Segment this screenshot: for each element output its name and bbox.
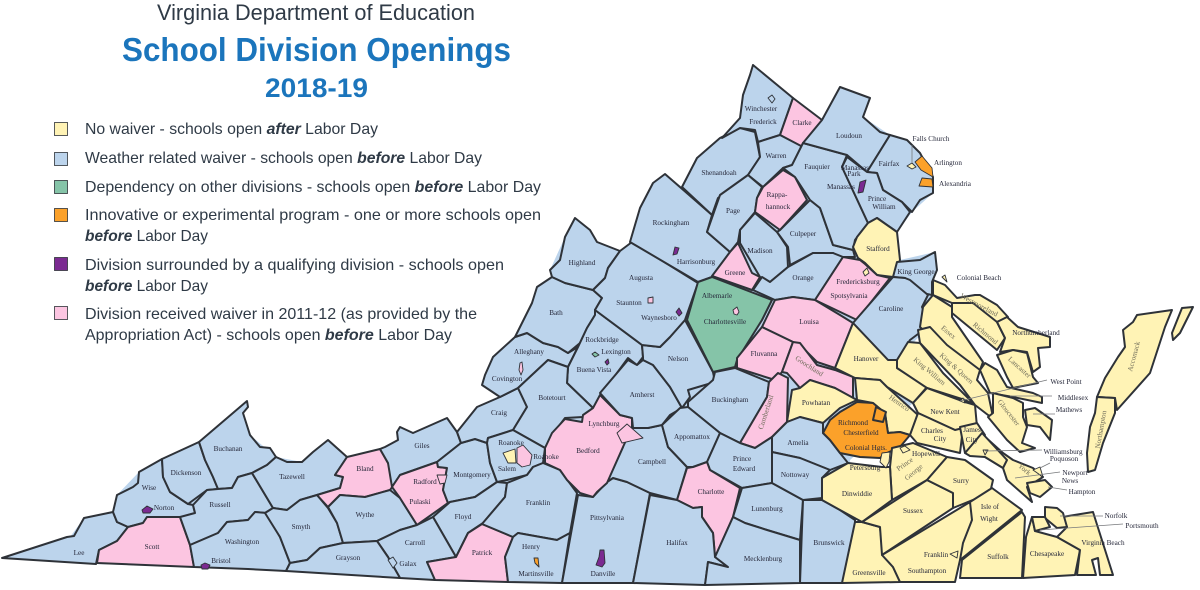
legend: innovative or experimental program: Innovative or experimental program - one or more schools open xyxy=(85,207,541,224)
map: division labels: Fredericksburg xyxy=(836,278,880,286)
map: division labels: Nottoway xyxy=(781,471,810,479)
map: division labels: Charles xyxy=(921,427,943,435)
map: division labels: Amelia xyxy=(787,439,809,447)
legend: surrounded division xyxy=(54,257,504,295)
map: division labels: Northumberland xyxy=(1012,329,1060,337)
map: division labels: Giles xyxy=(414,442,430,450)
map: division labels: Alexandria xyxy=(939,180,972,188)
map: division labels: Essex xyxy=(939,324,958,341)
map: division labels: Carroll xyxy=(405,539,425,547)
map: division labels: Lexington xyxy=(601,348,631,356)
map: division labels: Spotsylvania xyxy=(830,292,868,300)
map: division labels: Bland xyxy=(356,465,374,473)
map: division labels: King George xyxy=(897,268,935,276)
map: division labels: Williamsburg xyxy=(1043,448,1083,456)
map: division labels xyxy=(74,105,1159,578)
map: division labels: Martinsville xyxy=(518,570,554,578)
map: division labels: Colonial Hgts. xyxy=(845,444,887,452)
tidewater counties xyxy=(822,280,1193,583)
map: division labels: Patrick xyxy=(472,549,493,557)
map: division labels: Fauquier xyxy=(804,163,830,171)
map: division labels: hannock xyxy=(766,203,791,211)
southwest counties xyxy=(2,401,513,582)
map: division labels: King & Queen xyxy=(938,351,975,386)
map: division labels: Rappa- xyxy=(767,191,788,199)
map: division labels: Harrisonburg xyxy=(677,258,715,266)
map: division labels: Isle of xyxy=(981,503,1000,511)
map: division labels: Albemarle xyxy=(702,292,732,300)
map: division labels: Amherst xyxy=(630,391,654,399)
map: division labels: Westmoreland xyxy=(959,292,999,319)
map: division labels: Hanover xyxy=(854,355,879,363)
independent cities xyxy=(142,95,1043,569)
map: division labels: Bath xyxy=(549,309,563,317)
map: division labels: Sussex xyxy=(903,507,923,515)
map: division labels: Mecklenburg xyxy=(744,555,782,563)
map: division labels: Buchanan xyxy=(214,445,243,453)
map: division labels: Richmond xyxy=(838,419,868,427)
map: division labels: Waynesboro xyxy=(641,314,677,322)
map: division labels: Prince xyxy=(895,456,915,473)
map: division labels: Charlottesville xyxy=(704,318,746,326)
map: division labels: Middlesex xyxy=(1058,394,1089,402)
title xyxy=(122,0,511,103)
legend: 2011-12 waiver: Appropriation Act) - schools open before Labor Day xyxy=(85,327,452,344)
map: division labels: Campbell xyxy=(638,458,666,466)
map: division labels: Prince xyxy=(733,455,751,463)
map: division labels: Augusta xyxy=(629,274,654,282)
map: division labels: Hampton xyxy=(1069,488,1096,496)
map: division labels: Rockingham xyxy=(653,219,690,227)
map: division labels: Highland xyxy=(569,259,596,267)
map: division labels: Grayson xyxy=(336,554,361,562)
map: division labels: Madison xyxy=(747,247,773,255)
legend: 2011-12 waiver: Division received waiver in 2011-12 (as provided by the xyxy=(85,306,477,323)
map: division labels: Greensville xyxy=(852,569,886,577)
map: division labels: Fluvanna xyxy=(751,350,778,358)
map: division labels: Mathews xyxy=(1056,406,1082,414)
map: division labels: Orange xyxy=(792,274,814,282)
map: division labels: Russell xyxy=(209,501,231,509)
map: division labels: Covington xyxy=(492,375,523,383)
map: division labels: Roanoke xyxy=(498,439,524,447)
map: division labels: Salem xyxy=(498,465,516,473)
map: division labels: Nelson xyxy=(668,355,689,363)
map: division labels: Henry xyxy=(522,543,540,551)
legend: innovative or experimental program: before Labor Day xyxy=(85,228,208,245)
legend: surrounded division: before Labor Day xyxy=(85,278,208,295)
map: division labels: Montgomery xyxy=(453,471,491,479)
map: division labels: James xyxy=(963,426,981,434)
map: division labels: King William xyxy=(912,356,947,387)
map: division labels: Washington xyxy=(225,538,259,546)
map: division labels: Norfolk xyxy=(1105,512,1128,520)
map: division labels: Portsmouth xyxy=(1125,522,1159,530)
map: division labels: Wythe xyxy=(356,511,374,519)
map: division labels: Dickenson xyxy=(171,469,202,477)
map: division labels: Bristol xyxy=(211,557,231,565)
map: division labels: George xyxy=(903,463,924,482)
map: division labels: Lynchburg xyxy=(588,420,620,428)
map: division labels: Pittsylvania xyxy=(590,514,625,522)
map: division labels: Southampton xyxy=(908,567,947,575)
map: division labels: Winchester xyxy=(745,105,778,113)
map: division labels: Craig xyxy=(491,409,507,417)
map: division labels: Colonial Beach xyxy=(957,274,1002,282)
title: School Division Openings xyxy=(122,31,511,68)
map: division labels: Greene xyxy=(725,269,745,277)
map: division labels: Wise xyxy=(142,484,156,492)
map: division labels: Floyd xyxy=(455,513,472,521)
map: division labels: Lunenburg xyxy=(751,505,783,513)
map: division labels: Henrico xyxy=(887,393,911,414)
map: division labels: Staunton xyxy=(616,299,642,307)
map: division labels: Prince xyxy=(868,195,886,203)
map: division labels: Powhatan xyxy=(802,399,831,407)
central-west counties xyxy=(457,174,730,583)
map: division labels: Rockbridge xyxy=(585,336,619,344)
map: division labels: Appomattox xyxy=(674,433,710,441)
map: division labels: Buckingham xyxy=(712,396,749,404)
legend: no waiver: No waiver - schools open after Labor Day xyxy=(85,121,378,138)
legend: dependency on other divisions: Dependency on other divisions - schools open before Labor Day xyxy=(85,179,541,196)
map: division labels: Northampton xyxy=(1094,410,1108,449)
map: division labels: Arlington xyxy=(934,159,962,167)
map: division labels: Brunswick xyxy=(813,539,845,547)
legend: weather related waiver: Weather related waiver - schools open before Labor Day xyxy=(85,150,482,167)
map: division labels: Radford xyxy=(413,478,437,486)
title: 2018-19 xyxy=(265,73,368,103)
map: division labels: New Kent xyxy=(930,408,960,416)
legend: surrounded division: Division surrounded by a qualifying division - schools open xyxy=(85,257,504,274)
map: division labels: Galax xyxy=(399,560,417,568)
map: division labels: Dinwiddie xyxy=(842,490,872,498)
map: division labels: Frederick xyxy=(749,118,777,126)
map: division labels: Petersburg xyxy=(850,464,881,472)
map: division labels: Stafford xyxy=(866,245,890,253)
state underlay xyxy=(70,87,935,585)
leader lines xyxy=(912,145,1123,530)
legend: innovative or experimental program xyxy=(54,207,541,245)
map: division labels: Tazewell xyxy=(279,473,305,481)
map: division labels: Manassas xyxy=(841,164,869,172)
map: division labels: Lee xyxy=(74,549,84,557)
map: division labels: Roanoke xyxy=(533,453,559,461)
map: division labels: Smyth xyxy=(292,523,311,531)
map: division labels: Hopewell xyxy=(912,450,940,458)
map: division labels: Danville xyxy=(591,570,615,578)
map: division labels: City xyxy=(934,435,947,443)
map: division labels: Clarke xyxy=(792,119,812,127)
map: division labels: City xyxy=(966,436,979,444)
map: division labels: York xyxy=(1016,462,1033,477)
map: division labels: Loudoun xyxy=(836,132,862,140)
central counties xyxy=(633,277,857,585)
map: division labels: Lancaster xyxy=(1006,355,1033,380)
map: division labels: West Point xyxy=(1050,378,1082,386)
northern counties xyxy=(682,65,937,360)
map: division labels: Caroline xyxy=(879,305,903,313)
map: division labels: Suffolk xyxy=(987,553,1009,561)
map: division labels: Louisa xyxy=(799,318,820,326)
map: division labels: Franklin xyxy=(924,551,949,559)
map: division labels: Poquoson xyxy=(1050,455,1079,463)
map: division labels: Page xyxy=(726,207,740,215)
map: division labels: Goochland xyxy=(794,354,825,378)
map: division labels: Accomack xyxy=(1126,340,1142,372)
map: division labels: Buena Vista xyxy=(577,366,612,374)
map: division labels: Chesapeake xyxy=(1030,550,1064,558)
map: division labels: Fairfax xyxy=(879,160,900,168)
map: division labels: Norton xyxy=(154,504,175,512)
map: division labels: Bedford xyxy=(576,447,600,455)
map: division labels: Newport xyxy=(1062,469,1088,477)
map: division labels: Manassas xyxy=(827,183,855,191)
map: division labels: Franklin xyxy=(526,499,551,507)
map: division labels: Scott xyxy=(145,543,159,551)
legend xyxy=(54,121,541,344)
map: division labels: Halifax xyxy=(666,539,688,547)
map: division labels: Charlotte xyxy=(698,488,724,496)
map: division labels: Chesterfield xyxy=(843,429,879,437)
map: division labels: Wight xyxy=(980,515,998,523)
map: division labels: News xyxy=(1062,477,1078,485)
map: division labels: Richmond xyxy=(971,321,1000,346)
map: division labels: Surry xyxy=(953,477,969,485)
map: division labels: Gloucester xyxy=(996,398,1022,428)
map: division labels: William xyxy=(872,203,896,211)
map: division labels: Cumberland xyxy=(757,394,776,431)
map: division labels: Falls Church xyxy=(913,135,950,143)
map: division labels: Shenandoah xyxy=(701,169,737,177)
map: division labels: Warren xyxy=(766,152,787,160)
map: division labels: Park xyxy=(847,170,861,178)
legend: 2011-12 waiver xyxy=(54,306,477,344)
map: division labels: Alleghany xyxy=(514,348,544,356)
map: division labels: Edward xyxy=(733,465,756,473)
map: division labels: Virginia Beach xyxy=(1081,539,1125,547)
map: division labels: Culpeper xyxy=(790,230,817,238)
title: Virginia Department of Education xyxy=(157,0,475,25)
map: division labels: Pulaski xyxy=(409,498,431,506)
map: division labels: Botetourt xyxy=(538,394,566,402)
